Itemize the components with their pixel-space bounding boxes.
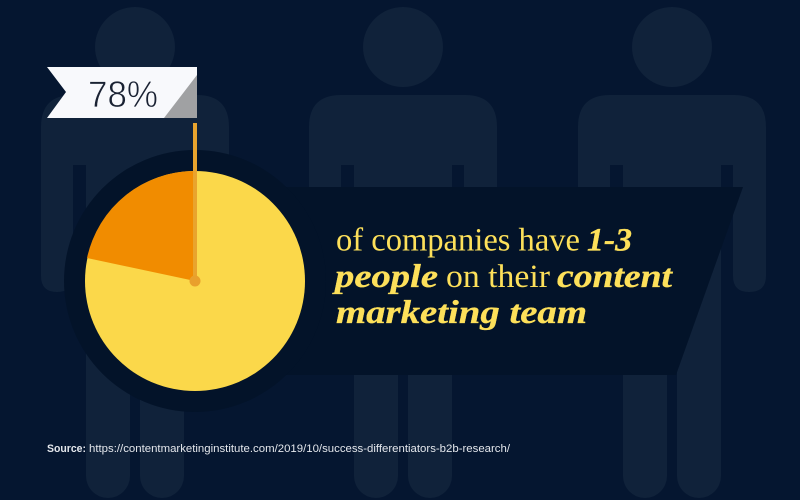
headline text (331, 222, 673, 331)
pie chart (64, 150, 326, 412)
headline text: people (331, 259, 438, 295)
headline text: on their (446, 259, 550, 295)
flag with 78%: 78% (88, 74, 158, 115)
headline text: content (557, 259, 673, 295)
flag pole (190, 123, 200, 286)
banner (190, 187, 743, 375)
headline text: of companies have (336, 222, 580, 258)
source line: https://contentmarketinginstitute.com/2019/10/success-differentiators-b2b-research/ (89, 443, 511, 455)
headline text: marketing team (336, 295, 587, 331)
headline text: 1-3 (587, 222, 632, 258)
flag with 78% (47, 67, 197, 118)
source line: Source: (47, 443, 86, 455)
